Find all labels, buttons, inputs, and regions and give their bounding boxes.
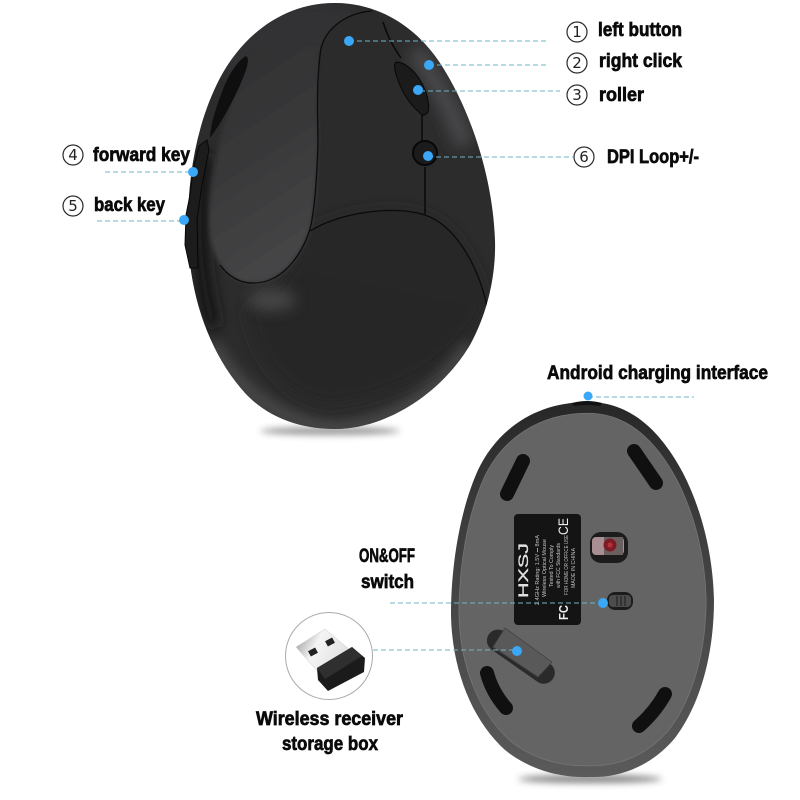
right side highlight bbox=[415, 50, 465, 145]
mouse body bbox=[188, 3, 495, 429]
foot bottom right bbox=[639, 694, 665, 726]
label text: FC bbox=[556, 604, 571, 620]
side keys bbox=[185, 140, 209, 268]
label text: HXSJ bbox=[515, 543, 531, 598]
label 2: right click: 2 bbox=[572, 54, 582, 72]
label 5: back key: back key bbox=[94, 194, 165, 216]
on/off switch bbox=[607, 592, 633, 610]
label 6: DPI Loop bbox=[574, 146, 699, 168]
label text: CE bbox=[555, 518, 571, 535]
bottom view mouse bbox=[451, 401, 714, 777]
label 3: roller: roller bbox=[599, 84, 644, 106]
foot pads bbox=[487, 451, 665, 726]
label: Android charging interface: Android charging interface bbox=[547, 362, 768, 384]
callout dots and leaders bbox=[97, 36, 694, 656]
palm rest bbox=[472, 292, 490, 341]
usb body bbox=[317, 647, 365, 691]
roller bbox=[395, 62, 429, 115]
outer rim bbox=[451, 402, 714, 777]
label text: MADE IN CHINA bbox=[571, 547, 577, 588]
label: ON&OFF switch bbox=[359, 545, 415, 593]
label: Wireless receiver storage box: storage box bbox=[282, 733, 378, 755]
label plate bbox=[514, 514, 581, 625]
top view mouse bbox=[185, 0, 495, 429]
DPI button bbox=[413, 141, 437, 165]
label text: 2.4GHz Rating: 1.5V ⎓ 8mA bbox=[535, 534, 541, 605]
soft highlight bbox=[248, 289, 296, 311]
top shoulder bbox=[223, 3, 349, 72]
foot top left bbox=[507, 461, 523, 494]
label 5: back key: 5 bbox=[68, 197, 78, 215]
shadow under bottom mouse bbox=[518, 775, 662, 783]
optical sensor bbox=[590, 532, 628, 563]
palm rest outline bbox=[310, 210, 487, 306]
label: ON&OFF switch: switch bbox=[361, 571, 414, 593]
charging port bbox=[572, 401, 602, 406]
foot top right bbox=[634, 451, 656, 483]
label: ON&OFF switch: ON&OFF bbox=[359, 545, 415, 567]
label 4: forward key: 4 bbox=[68, 146, 78, 164]
label 1: left button: left button bbox=[598, 19, 682, 41]
shadow under top mouse bbox=[260, 427, 400, 435]
label 4: forward key bbox=[63, 144, 190, 166]
label 6: DPI Loop: DPI Loop+/- bbox=[607, 146, 699, 168]
center seam bbox=[383, 22, 425, 214]
thumb panel bbox=[208, 88, 317, 284]
palm rest fill upper bbox=[486, 305, 487, 306]
main button panel bbox=[319, 18, 373, 92]
base plate bbox=[459, 413, 706, 766]
label 3: roller bbox=[567, 84, 644, 106]
thumb panel outline bbox=[220, 11, 372, 283]
label 1: left button: 1 bbox=[572, 23, 582, 41]
receiver slot bbox=[483, 625, 559, 688]
label: Wireless receiver storage box: Wireless receiver bbox=[256, 708, 403, 730]
label text bbox=[515, 518, 577, 620]
label text: with FCC Standards bbox=[556, 543, 562, 588]
label text: FOR HOME OR OFFICE USE bbox=[564, 535, 570, 595]
label 4: forward key: forward key bbox=[93, 144, 190, 166]
side groove bbox=[210, 56, 248, 138]
label: Wireless receiver storage box bbox=[256, 708, 403, 755]
bottom rim highlight bbox=[212, 345, 470, 429]
label 1: left button bbox=[567, 19, 682, 42]
USB receiver icon bbox=[286, 612, 372, 700]
usb plug bbox=[296, 629, 350, 672]
left dark band bbox=[200, 160, 212, 320]
label 2: right click bbox=[567, 50, 682, 73]
label 2: right click: right click bbox=[599, 50, 682, 72]
label 3: roller: 3 bbox=[572, 86, 582, 104]
label text: Wireless Optical Mouse bbox=[542, 539, 548, 597]
receiver cover bbox=[493, 628, 552, 677]
label text: Tested To Comply bbox=[549, 545, 555, 587]
label 5: back key bbox=[63, 194, 165, 216]
foot bottom left bbox=[487, 673, 506, 708]
label 6: DPI Loop: 6 bbox=[579, 148, 589, 166]
